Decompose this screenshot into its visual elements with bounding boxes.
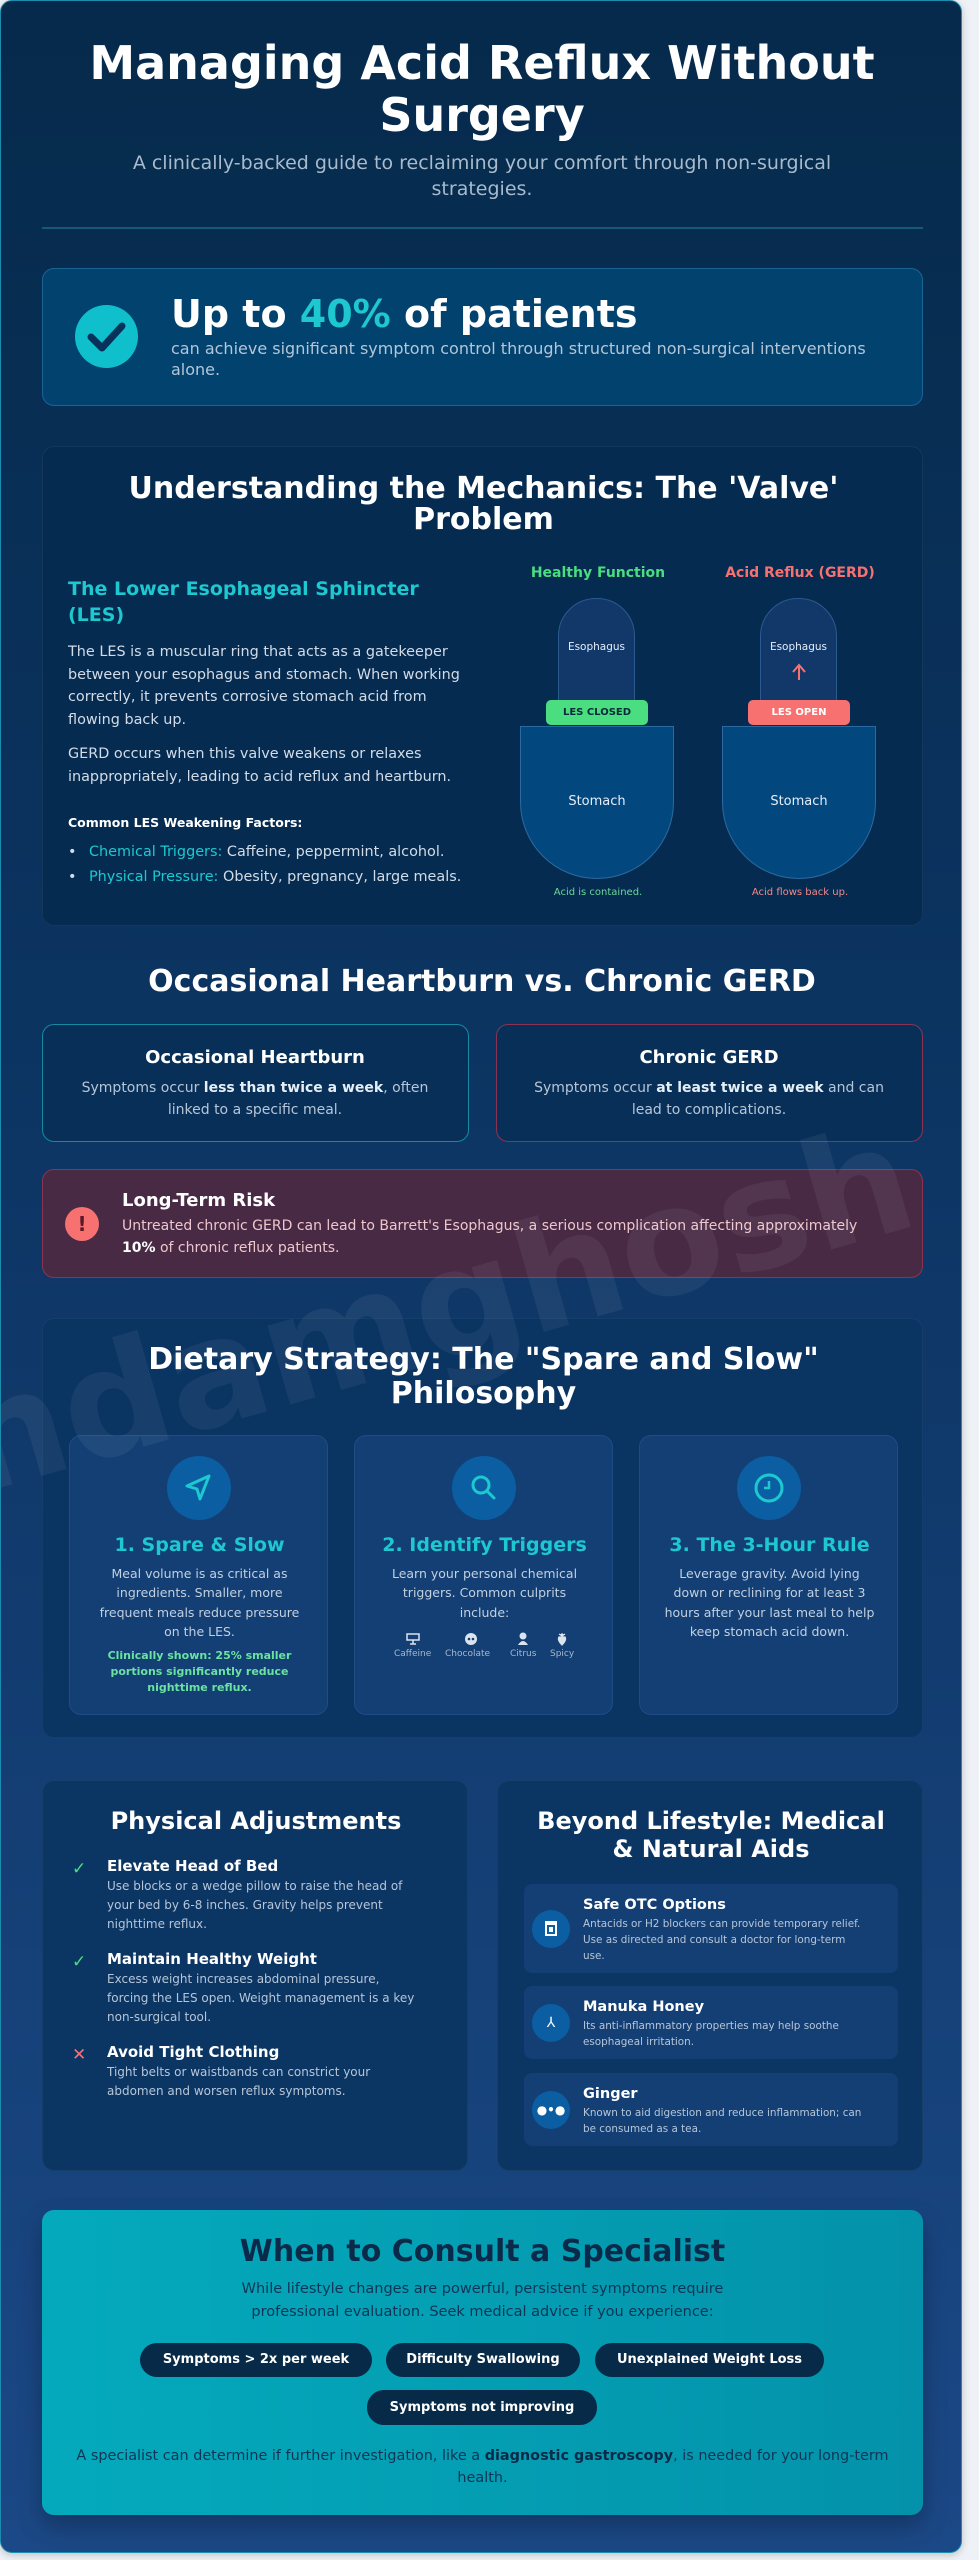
text block: correctly, it prevents corrosive stomach acid from <box>68 689 427 705</box>
aid: OTC: Use as directed and consult a doctor for long-term <box>583 1934 845 1946</box>
title: Surgery <box>379 88 585 142</box>
panel: dietary strategy: Dietary Strategy: The "Spare and Slow" <box>148 1342 819 1377</box>
panel: specialist: A specialist can determine if further investigation, like a diagnostic gastroscopy, is needed for your long-term <box>76 2448 889 2464</box>
callout: long-term risk: Long-Term Risk <box>122 1190 275 1211</box>
subtitle <box>133 152 831 200</box>
heading: Problem <box>413 502 554 537</box>
item: elevate head: nighttime reflux. <box>107 1917 207 1931</box>
item: healthy weight <box>72 1950 414 2024</box>
aid: ginger: Ginger <box>583 2086 638 2102</box>
aid: OTC: Safe OTC Options <box>583 1897 726 1913</box>
panel: mechanics: inappropriately, leading to acid reflux and heartburn. <box>68 768 451 784</box>
aid: ginger: Known to aid digestion and reduce inflammation; can <box>583 2107 861 2119</box>
item: elevate head: Elevate Head of Bed <box>107 1857 278 1875</box>
aid: ginger: be consumed as a tea. <box>583 2123 701 2135</box>
callout: long-term risk: 10% of chronic reflux patients. <box>122 1240 339 1256</box>
card 1: on the LES. <box>164 1624 235 1639</box>
trigger icons <box>394 1632 574 1659</box>
card: occasional heartburn: linked to a specific meal. <box>168 1102 342 1118</box>
diagram: healthy <box>520 565 674 898</box>
aid: manuka honey <box>524 1986 898 2059</box>
item: tight clothing: abdomen and worsen reflux symptoms. <box>107 2084 346 2098</box>
card 1: Meal volume is as critical as <box>112 1566 287 1581</box>
item: elevate head: ✓ <box>72 1859 86 1879</box>
symptom pills: Difficulty Swallowing <box>406 2352 560 2367</box>
card: occasional heartburn: Symptoms occur less than twice a week, often <box>82 1080 428 1096</box>
item: elevate head: your bed by 6-8 inches. Gravity helps prevent <box>107 1898 383 1912</box>
stat text <box>171 339 866 379</box>
text block: flowing back up. <box>68 712 186 728</box>
panel: mechanics: GERD occurs when this valve weakens or relaxes <box>68 746 421 762</box>
stat text: alone. <box>171 360 220 379</box>
diagram: reflux: Acid flows back up. <box>752 887 848 898</box>
panel: medical & natural aids: & Natural Aids <box>612 1835 810 1863</box>
factors list: Physical Pressure: Obesity, pregnancy, large meals. <box>89 869 461 885</box>
symptom pills: Unexplained Weight Loss <box>617 2352 802 2367</box>
panel: mechanics <box>42 446 923 926</box>
panel: dietary strategy <box>42 1318 923 1738</box>
panel: medical & natural aids <box>497 1780 923 2171</box>
card 2: include: <box>460 1605 509 1620</box>
item: elevate head <box>72 1857 403 1931</box>
trigger icons: Chocolate <box>445 1649 490 1659</box>
factors list: Common LES Weakening Factors: <box>68 815 302 830</box>
diagram: healthy: LES CLOSED <box>563 707 631 718</box>
card 2 <box>354 1435 613 1715</box>
aid: ginger: ●•● <box>537 2103 565 2117</box>
aid: manuka honey: Manuka Honey <box>583 1999 704 2015</box>
aid: OTC: use. <box>583 1950 605 1962</box>
card 3 <box>639 1435 898 1715</box>
card 3: Leverage gravity. Avoid lying <box>679 1566 860 1581</box>
panel: specialist: professional evaluation. Seek medical advice if you experience: <box>251 2304 714 2320</box>
panel: physical adjustments: Physical Adjustments <box>111 1807 401 1835</box>
item: healthy weight: Maintain Healthy Weight <box>107 1950 317 1968</box>
item: elevate head: Use blocks or a wedge pillow to raise the head of <box>107 1879 402 1893</box>
card: chronic GERD <box>496 1024 923 1142</box>
card 1: nighttime reflux. <box>147 1681 252 1694</box>
card: chronic GERD: lead to complications. <box>632 1102 786 1118</box>
panel: specialist: When to Consult a Specialist <box>240 2234 725 2269</box>
panel: specialist: health. <box>457 2470 508 2486</box>
card 1 <box>69 1435 328 1715</box>
symptom pills <box>140 2343 824 2425</box>
section heading: comparison: Occasional Heartburn vs. Chronic GERD <box>148 964 816 999</box>
title <box>89 36 875 142</box>
item: healthy weight: non-surgical tool. <box>107 2010 211 2024</box>
aid: manuka honey: esophageal irritation. <box>583 2036 694 2048</box>
diagram: healthy: Esophagus <box>568 641 625 653</box>
text block: The LES is a muscular ring that acts as a gatekeeper <box>68 644 448 660</box>
title: Managing Acid Reflux Without <box>89 36 875 90</box>
symptom pills: Symptoms not improving <box>390 2400 574 2415</box>
card 1: Clinically shown: 25% smaller <box>108 1649 291 1662</box>
card: chronic GERD: Chronic GERD <box>639 1047 779 1068</box>
factors list <box>68 815 461 885</box>
item: tight clothing: Avoid Tight Clothing <box>107 2043 279 2061</box>
card 1: frequent meals reduce pressure <box>100 1605 299 1620</box>
LES heading: (LES) <box>68 604 124 626</box>
card 1: portions significantly reduce <box>110 1665 288 1678</box>
diagram: healthy: Stomach <box>568 794 626 809</box>
card 3: hours after your last meal to help <box>665 1605 874 1620</box>
panel: specialist <box>42 2210 923 2515</box>
symptom pills: Symptoms > 2x per week <box>163 2352 349 2367</box>
subtitle: strategies. <box>432 178 532 200</box>
trigger icons: Caffeine <box>394 1649 431 1659</box>
trigger icons: Spicy <box>550 1649 574 1659</box>
stat text: can achieve significant symptom control through structured non-surgical interventions <box>171 339 866 358</box>
card 3: keep stomach acid down. <box>690 1624 849 1639</box>
LES heading: The Lower Esophageal Sphincter <box>68 578 419 600</box>
arrow: up <box>792 664 806 680</box>
card: occasional heartburn: Occasional Heartburn <box>145 1047 365 1068</box>
diagram: reflux: Acid Reflux (GERD) <box>725 565 875 581</box>
diagram: healthy: Healthy Function <box>531 565 665 581</box>
item: tight clothing: ✕ <box>72 2045 86 2065</box>
card 3: 3. The 3-Hour Rule <box>669 1534 870 1556</box>
text block: between your esophagus and stomach. When working <box>68 666 460 682</box>
item: tight clothing: Tight belts or waistbands can constrict your <box>107 2065 370 2079</box>
diagram: reflux: LES OPEN <box>772 707 826 718</box>
callout: long-term risk: Untreated chronic GERD can lead to Barrett's Esophagus, a serious complication affecting approximately <box>122 1218 857 1234</box>
aid: manuka honey: Its anti-inflammatory properties may help soothe <box>583 2020 839 2032</box>
icon: check circle <box>75 305 138 368</box>
diagram: reflux: Esophagus <box>770 641 827 653</box>
heading: Understanding the Mechanics: The 'Valve' <box>129 471 838 506</box>
card: occasional heartburn <box>42 1024 469 1142</box>
factors list: • <box>68 844 76 860</box>
item: healthy weight: forcing the LES open. Weight management is a key <box>107 1991 414 2005</box>
card 2: Learn your personal chemical <box>392 1566 577 1581</box>
card 3: down or reclining for at least 3 <box>674 1585 865 1600</box>
panel: medical & natural aids: Beyond Lifestyle: Medical <box>537 1807 885 1835</box>
card 1: ingredients. Smaller, more <box>116 1585 283 1600</box>
aid: ginger <box>524 2073 898 2146</box>
factors list: Chemical Triggers: Caffeine, peppermint, alcohol. <box>89 844 444 860</box>
item: tight clothing <box>72 2043 370 2098</box>
diagram: reflux <box>722 565 876 898</box>
text block <box>68 644 460 728</box>
panel: physical adjustments <box>42 1780 468 2171</box>
aid: OTC <box>524 1884 898 1973</box>
stat card <box>42 268 923 406</box>
LES heading <box>68 578 419 626</box>
item: healthy weight: ✓ <box>72 1952 86 1972</box>
stat headline: Up to 40% of patients <box>171 292 638 336</box>
diagram: healthy: Acid is contained. <box>554 887 642 898</box>
item: healthy weight: Excess weight increases abdominal pressure, <box>107 1972 379 1986</box>
aid: manuka honey: ⅄ <box>547 2015 555 2031</box>
icon: warning: ! <box>77 1212 87 1236</box>
heading <box>129 471 838 537</box>
diagram: reflux: Stomach <box>770 794 828 809</box>
factors list: • <box>68 869 76 885</box>
icon: warning <box>65 1207 99 1241</box>
card 2: triggers. Common culprits <box>403 1585 566 1600</box>
card 1: 1. Spare & Slow <box>114 1534 285 1556</box>
subtitle: A clinically-backed guide to reclaiming your comfort through non-surgical <box>133 152 831 174</box>
card: chronic GERD: Symptoms occur at least twice a week and can <box>534 1080 884 1096</box>
callout: long-term risk <box>42 1169 923 1278</box>
aid: OTC: Antacids or H2 blockers can provide temporary relief. <box>583 1918 860 1930</box>
panel: specialist: While lifestyle changes are powerful, persistent symptoms require <box>242 2281 723 2297</box>
trigger icons: Citrus <box>510 1649 536 1659</box>
panel: dietary strategy: Philosophy <box>391 1376 576 1411</box>
card 2: 2. Identify Triggers <box>382 1534 587 1556</box>
